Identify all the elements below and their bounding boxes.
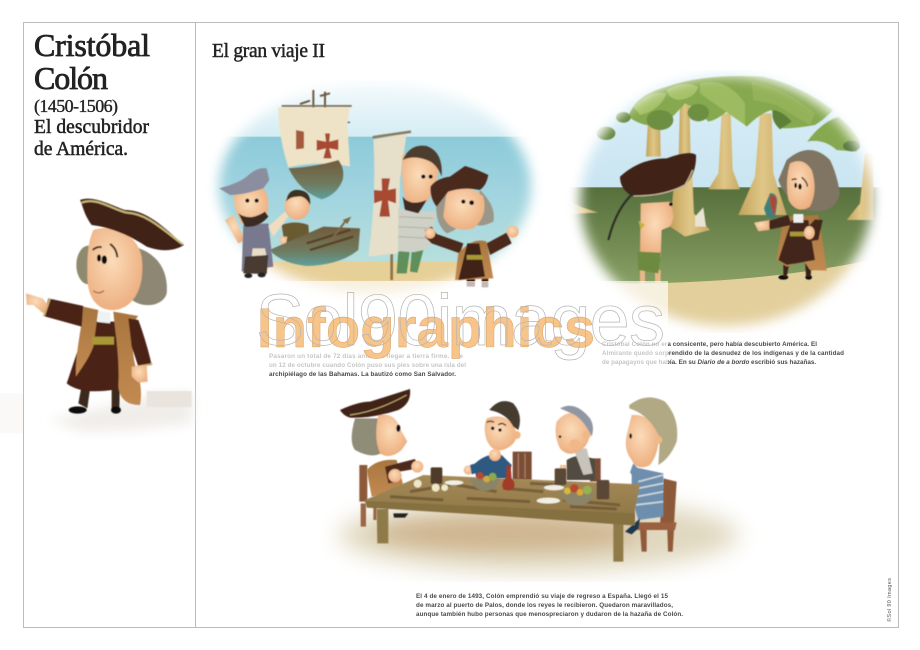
- table: [365, 465, 640, 562]
- watermark: Sol90images: Sol90images: [256, 281, 665, 361]
- sky: [232, 85, 518, 137]
- sky: [576, 72, 876, 188]
- title block: (1450-1506): [34, 96, 118, 117]
- caption: return to Spain: [416, 593, 683, 618]
- palm canopy: [597, 76, 860, 152]
- old man: [556, 406, 595, 480]
- fair-haired man: [613, 397, 677, 534]
- panel: Columbus portrait: [0, 199, 192, 433]
- grass: [563, 187, 887, 287]
- panel: arrival scene: [203, 80, 547, 303]
- Columbus seated: [340, 389, 423, 518]
- bearded officer: [397, 146, 442, 273]
- title block: de América.: [34, 139, 128, 160]
- title block: [34, 27, 150, 160]
- section heading: El gran viaje II: [212, 41, 325, 62]
- sandy ground: [331, 496, 746, 582]
- caption: first landing: archipiélago de las Bahamas. La bautizó como San Salvador.: [269, 371, 456, 378]
- caption: discovery of America: Almirante quedó sorprendido de la desnudez de los indígenas y de la cantidad: [602, 350, 844, 357]
- title block: Colón: [34, 60, 108, 96]
- watermark panel: [252, 281, 668, 368]
- ship: [278, 90, 352, 199]
- sea: [203, 137, 547, 263]
- caption: return to Spain: El 4 de enero de 1493, Colón emprendió su viaje de regreso a España. Llegó el 15: [416, 593, 668, 600]
- native figure: [608, 153, 706, 283]
- seated sailor in blue: [464, 401, 521, 478]
- image credit: ©Sol 90 Images: [886, 578, 893, 622]
- caption: discovery of America: de papagayos que había. En su Diario de a bordo escribió sus hazañas.: [602, 359, 816, 366]
- boat with sailor: [269, 190, 360, 266]
- chairs: [359, 452, 677, 552]
- Columbus arriving: [425, 166, 519, 287]
- watermark: Infographics: Infographics: [257, 296, 595, 359]
- panel: island encounter scene: [563, 70, 887, 333]
- bearded sailor: [219, 168, 288, 278]
- caption: return to Spain: aunque también hubo personas que menospreciaron y dudaron de la hazaña de Colón.: [416, 611, 683, 618]
- title block: Cristóbal: [34, 27, 150, 63]
- caption: first landing: Pasaron un total de 72 días antes de llegar a tierra firme. Fue: [269, 353, 463, 360]
- caption: first landing: un 12 de octubre cuando Colón puso sus pies sobre una isla del: [269, 362, 466, 369]
- Columbus with parrot: [754, 150, 840, 280]
- sand path: [612, 262, 862, 333]
- caption: discovery of America: [602, 341, 844, 366]
- palm trunks: [570, 100, 873, 237]
- title block: El descubridor: [34, 117, 150, 138]
- caption: discovery of America: Cristóbal Colón no era consicente, pero había descubierto América. El: [602, 341, 817, 348]
- caption: first landing: [269, 353, 466, 378]
- caption: return to Spain: de marzo al puerto de Palos, donde los reyes le recibieron. Quedaron maravillados,: [416, 602, 673, 609]
- banner with cross: [368, 132, 411, 280]
- beach: [267, 262, 497, 297]
- panel: table scene: [310, 389, 770, 582]
